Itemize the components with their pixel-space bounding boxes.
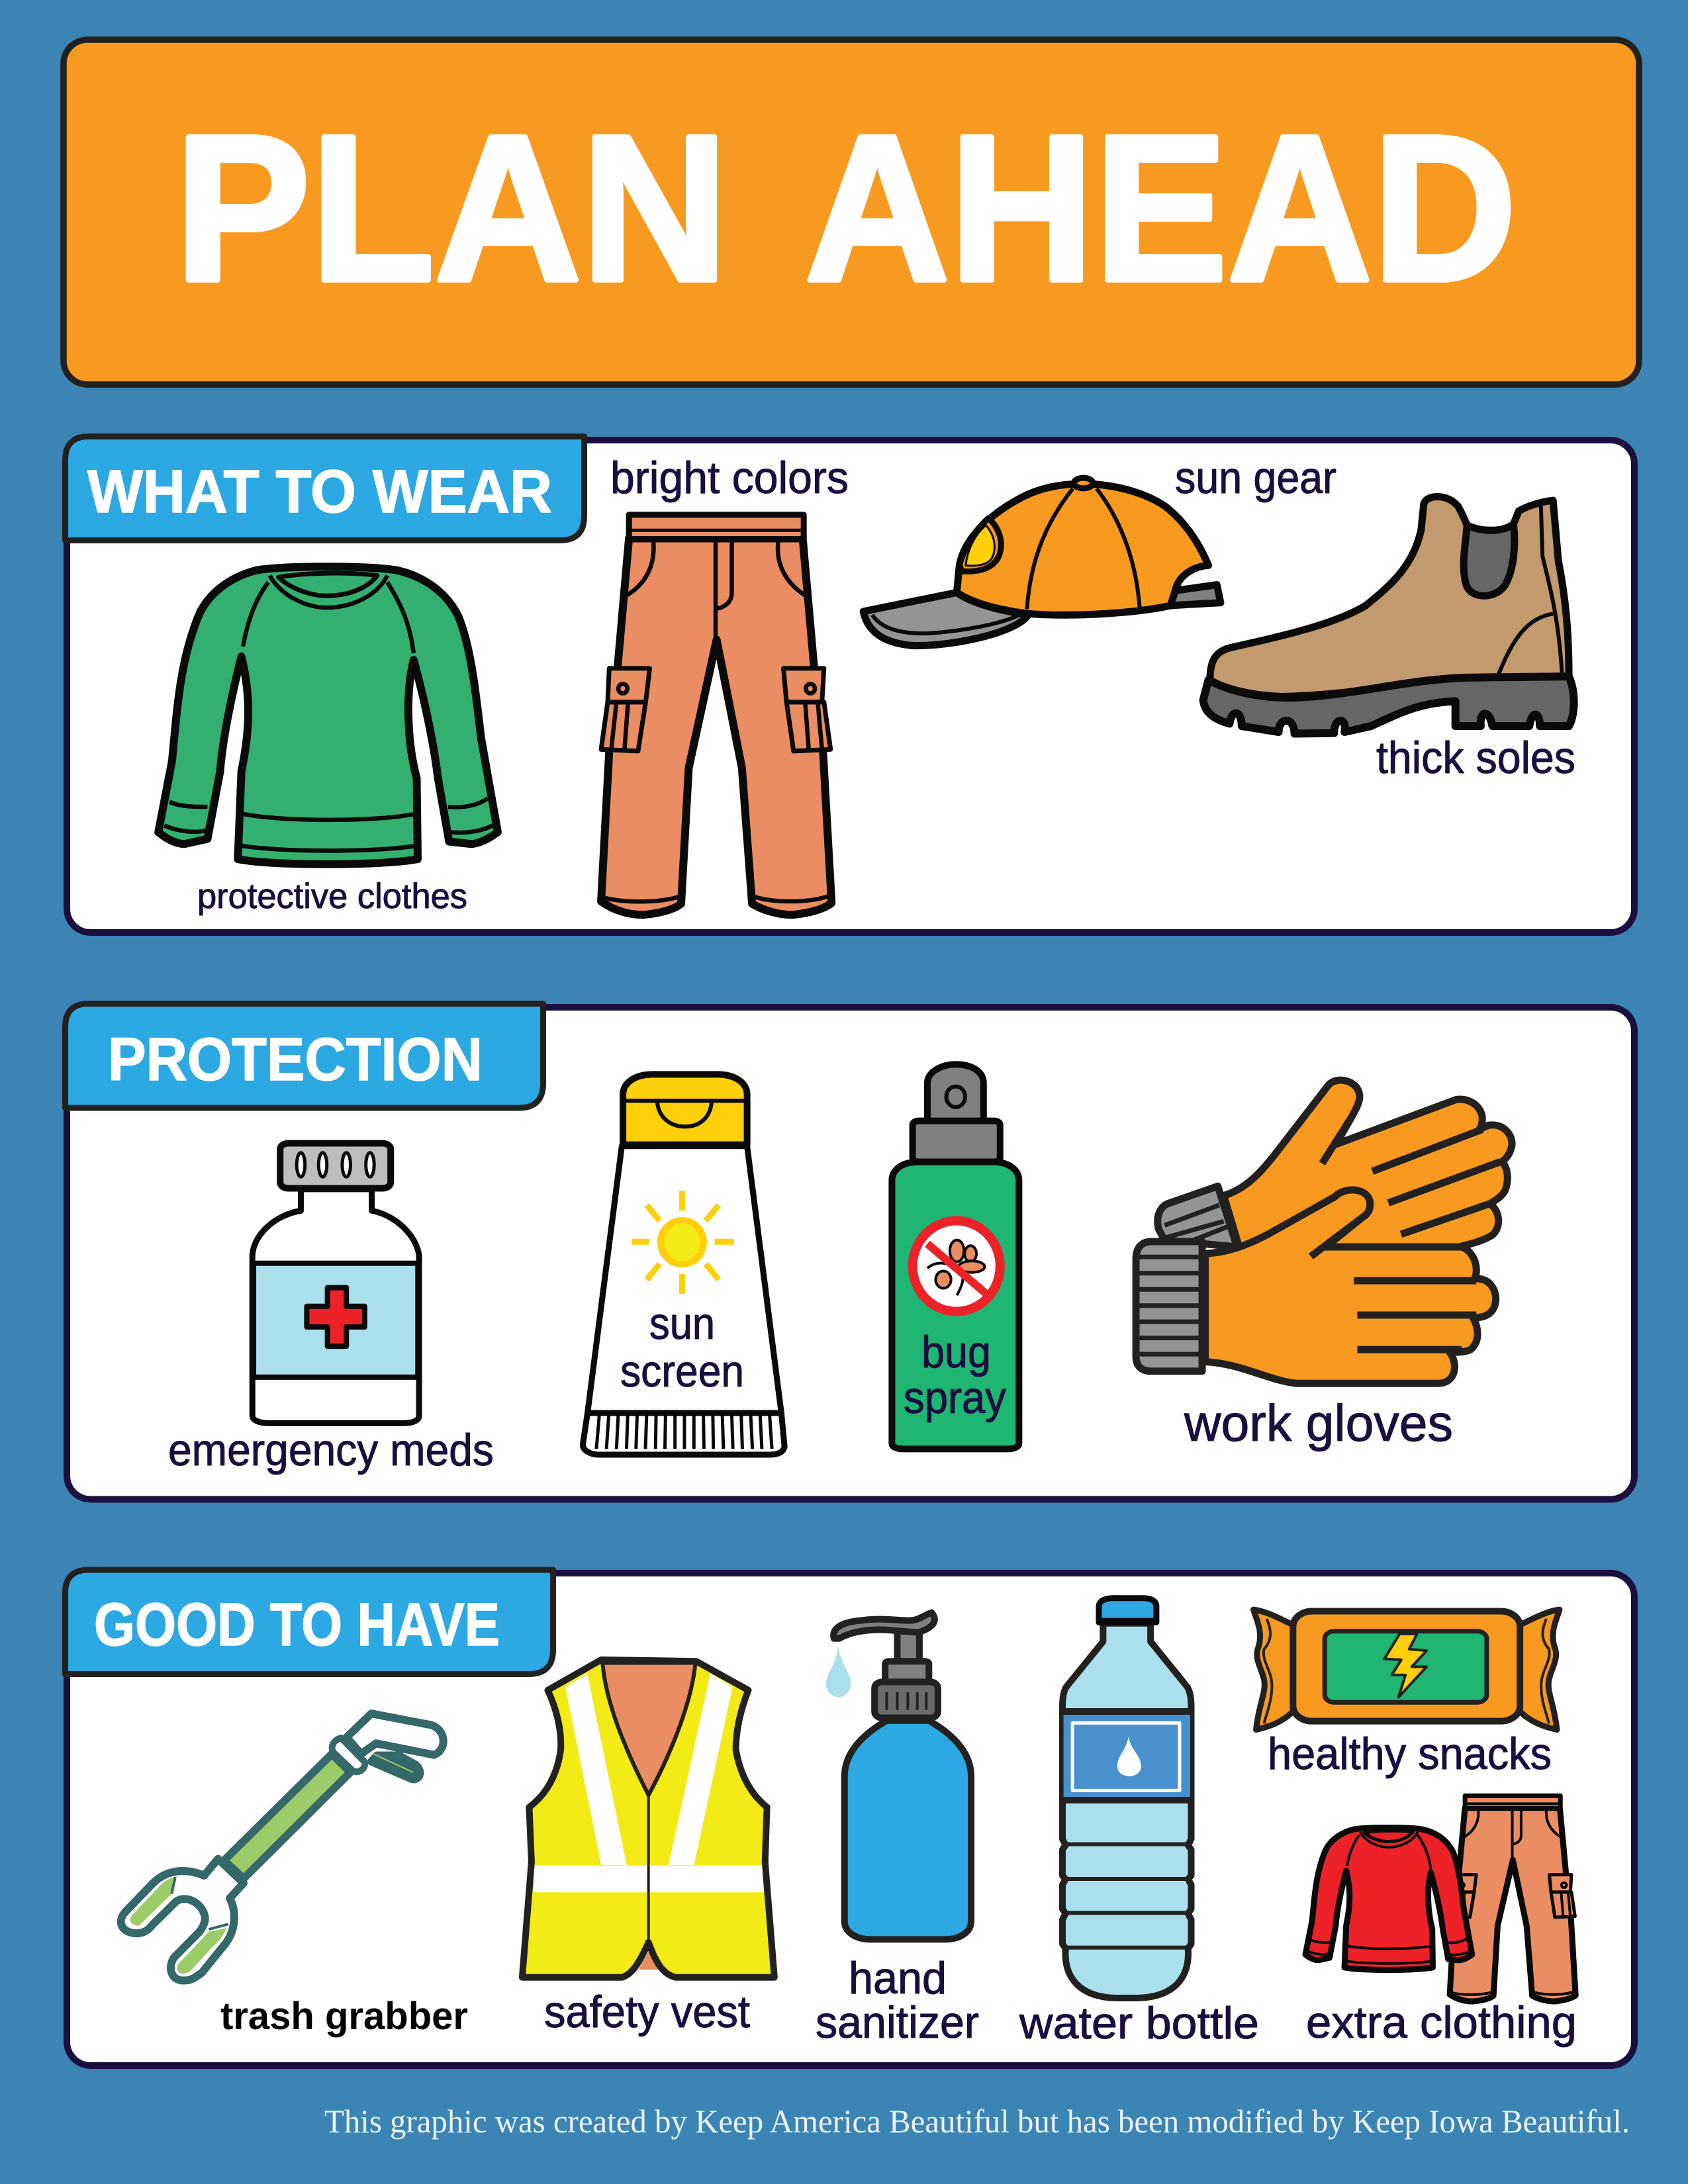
- icon: safety vest: [522, 1660, 774, 1978]
- footer credit: This graphic was created by Keep America Beautiful but has been modified by Keep Iowa Beautiful.: [324, 2103, 1630, 2140]
- icon: healthy snack bar: [1254, 1610, 1560, 1730]
- panel: what to wear: [65, 437, 1634, 933]
- label: emergency meds: emergency meds: [168, 1425, 494, 1475]
- title banner: [64, 40, 1639, 385]
- icon: orange cap: [863, 478, 1221, 646]
- label: water bottle: water bottle: [1019, 1998, 1259, 2048]
- icon: trash grabber: [121, 1713, 444, 1981]
- icon: boot: [1203, 496, 1574, 734]
- label: extra clothing: extra clothing: [1306, 1997, 1577, 2048]
- label: hand: hand: [849, 1953, 947, 2003]
- panel: good to have: [65, 1570, 1634, 2066]
- icon: green sweater: [158, 567, 498, 864]
- heading tab: protection: [65, 1003, 543, 1108]
- heading tab: what to wear: [65, 437, 584, 540]
- title: PLAN: [175, 92, 728, 324]
- icon: sunscreen tube: [583, 1074, 784, 1455]
- icon: water bottle: [1062, 1598, 1191, 1998]
- heading tab: good to have: [65, 1570, 553, 1674]
- label: healthy snacks: healthy snacks: [1268, 1729, 1552, 1779]
- heading tab: good to have: GOOD TO HAVE: [94, 1591, 500, 1659]
- label: screen: screen: [620, 1346, 744, 1396]
- icon: medicine bottle: [252, 1143, 419, 1423]
- label: spray: spray: [904, 1373, 1006, 1423]
- label: sun gear: sun gear: [1175, 453, 1336, 503]
- heading tab: what to wear: WHAT TO WEAR: [87, 458, 552, 525]
- icon: bug spray can: [892, 1064, 1019, 1449]
- label: sun: sun: [649, 1298, 715, 1349]
- label: trash grabber: trash grabber: [220, 1995, 468, 2038]
- label: safety vest: safety vest: [544, 1987, 750, 2037]
- title: AHEAD: [805, 92, 1517, 324]
- label: bright colors: bright colors: [610, 453, 849, 503]
- label: protective clothes: protective clothes: [197, 877, 467, 916]
- icon: extra clothing: [1305, 1796, 1575, 2001]
- heading tab: protection: PROTECTION: [108, 1026, 483, 1093]
- panel: protection: [65, 1003, 1634, 1500]
- label: sanitizer: sanitizer: [816, 1997, 979, 2048]
- icon: work gloves: [1136, 1080, 1512, 1383]
- icon: hand sanitizer: [826, 1613, 971, 1939]
- label: thick soles: thick soles: [1376, 733, 1575, 783]
- icon: orange pants: [601, 515, 831, 915]
- label: bug: bug: [921, 1327, 991, 1377]
- label: work gloves: work gloves: [1184, 1394, 1453, 1452]
